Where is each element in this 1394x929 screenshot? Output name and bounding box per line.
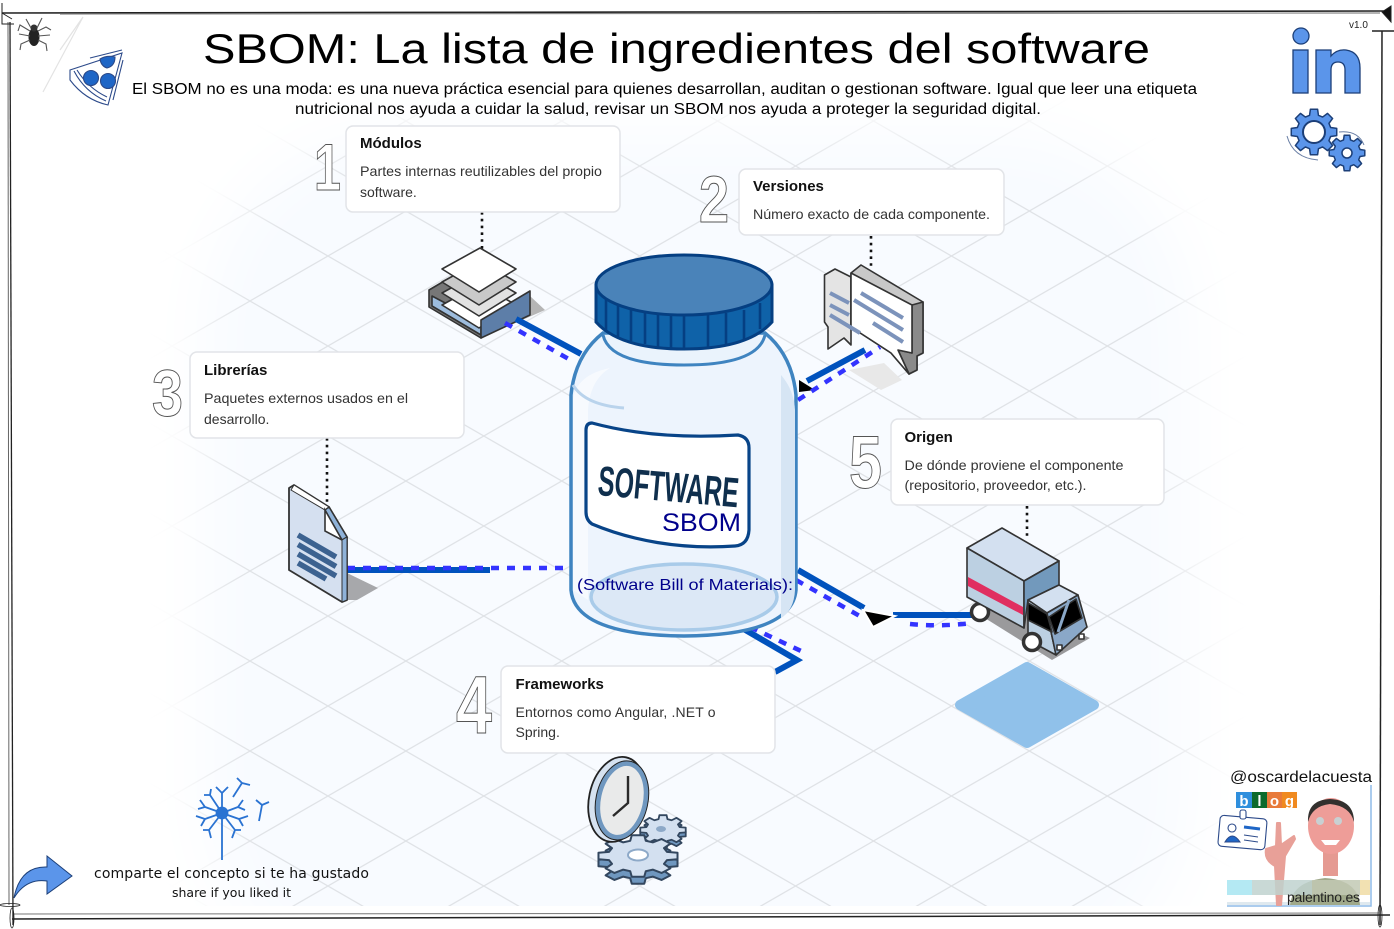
connector: frameworks <box>742 627 801 672</box>
connector: librerías <box>347 568 566 570</box>
jar highlight arc <box>573 385 624 408</box>
icon: document <box>289 485 378 602</box>
intro text <box>132 81 1197 118</box>
icon: chat bubbles <box>824 265 923 390</box>
icon: share arrow <box>14 856 72 898</box>
colour strip <box>1227 880 1370 895</box>
card 1: módulos <box>346 126 620 212</box>
blog badge: g <box>1285 793 1294 810</box>
dotted leaders <box>327 212 1027 540</box>
number 3: 3 <box>152 356 183 430</box>
isometric grid background <box>188 118 1208 906</box>
jar body <box>571 333 796 636</box>
card 2: versiones <box>739 169 1004 235</box>
number 4: 4 <box>456 660 492 751</box>
icon: delivery truck <box>967 528 1090 660</box>
blog badge: b <box>1239 793 1249 810</box>
neck ring <box>603 335 765 365</box>
jar label <box>586 423 749 547</box>
icon: stacked modules <box>429 248 545 338</box>
label text sbom: SBOM <box>662 509 741 537</box>
jar shading <box>781 375 795 618</box>
label text software: SOFTWARE <box>596 457 741 516</box>
site name: palentino.es <box>1287 889 1360 905</box>
card 5: origen <box>891 419 1164 505</box>
jar caption: (Software Bill of Materials): <box>577 577 793 594</box>
blue floor tile <box>960 667 1094 743</box>
share text: share if you liked it <box>172 885 291 900</box>
icon: jar <box>571 255 796 636</box>
card 1: módulos: software. <box>360 184 417 200</box>
connector: módulos <box>505 319 581 362</box>
number 1: 1 <box>314 130 341 204</box>
intro text: El SBOM no es una moda: es una nueva práctica esencial para quienes desarrollan, auditan o gestionan software. Igual que leer una etiqueta <box>132 81 1197 98</box>
card 3: librerías: Paquetes externos usados en el <box>204 390 408 406</box>
intro text: nutricional nos ayuda a cuidar la salud, revisar un SBOM nos ayuda a proteger la seguridad digital. <box>295 101 1041 118</box>
share text <box>94 866 369 900</box>
number 2: 2 <box>699 162 729 236</box>
bottom ellipse <box>591 564 777 630</box>
card 2: versiones: Versiones <box>753 178 824 195</box>
card 5: origen: Origen <box>904 429 953 446</box>
card 4: frameworks <box>501 666 775 753</box>
author photo frame <box>1227 785 1371 906</box>
blog badge <box>1236 792 1297 810</box>
icon: linkedin logo <box>1293 28 1360 93</box>
jar cap <box>596 255 772 349</box>
icon: dandelion <box>196 778 269 860</box>
icon: settings gears <box>1287 109 1365 171</box>
avatar <box>1266 798 1360 905</box>
connector: versiones <box>798 347 880 400</box>
author panel <box>1218 769 1372 906</box>
card 5: origen: (repositorio, proveedor, etc.). <box>904 477 1086 493</box>
faint sketch stroke <box>43 17 83 92</box>
card 3: librerías: Librerías <box>204 362 267 379</box>
card 4: frameworks: Entornos como Angular, .NET o <box>516 704 716 720</box>
card 1: módulos: Partes internas reutilizables del propio <box>360 163 602 179</box>
card 3: librerías <box>190 352 464 438</box>
title: SBOM: La lista de ingredientes del software <box>203 25 1150 72</box>
version label: v1.0 <box>1349 20 1368 31</box>
icon: spider <box>18 18 51 51</box>
card 1: módulos: Módulos <box>360 135 422 152</box>
blog badge: l <box>1257 793 1262 810</box>
connector: origen <box>796 570 973 627</box>
card 4: frameworks: Spring. <box>516 724 560 740</box>
handle: @oscardelacuesta <box>1230 769 1372 786</box>
card 3: librerías: desarrollo. <box>204 411 269 427</box>
number 5: 5 <box>849 421 882 504</box>
icon: pizza slice <box>70 50 123 105</box>
blog badge: o <box>1270 793 1279 810</box>
share text: comparte el concepto si te ha gustado <box>94 866 369 882</box>
icon: id badge <box>1218 810 1267 850</box>
card 4: frameworks: Frameworks <box>516 676 604 693</box>
card 2: versiones: Número exacto de cada componente. <box>753 206 990 222</box>
card 5: origen: De dónde proviene el componente <box>904 457 1124 473</box>
icon: clock and gears <box>581 751 686 884</box>
